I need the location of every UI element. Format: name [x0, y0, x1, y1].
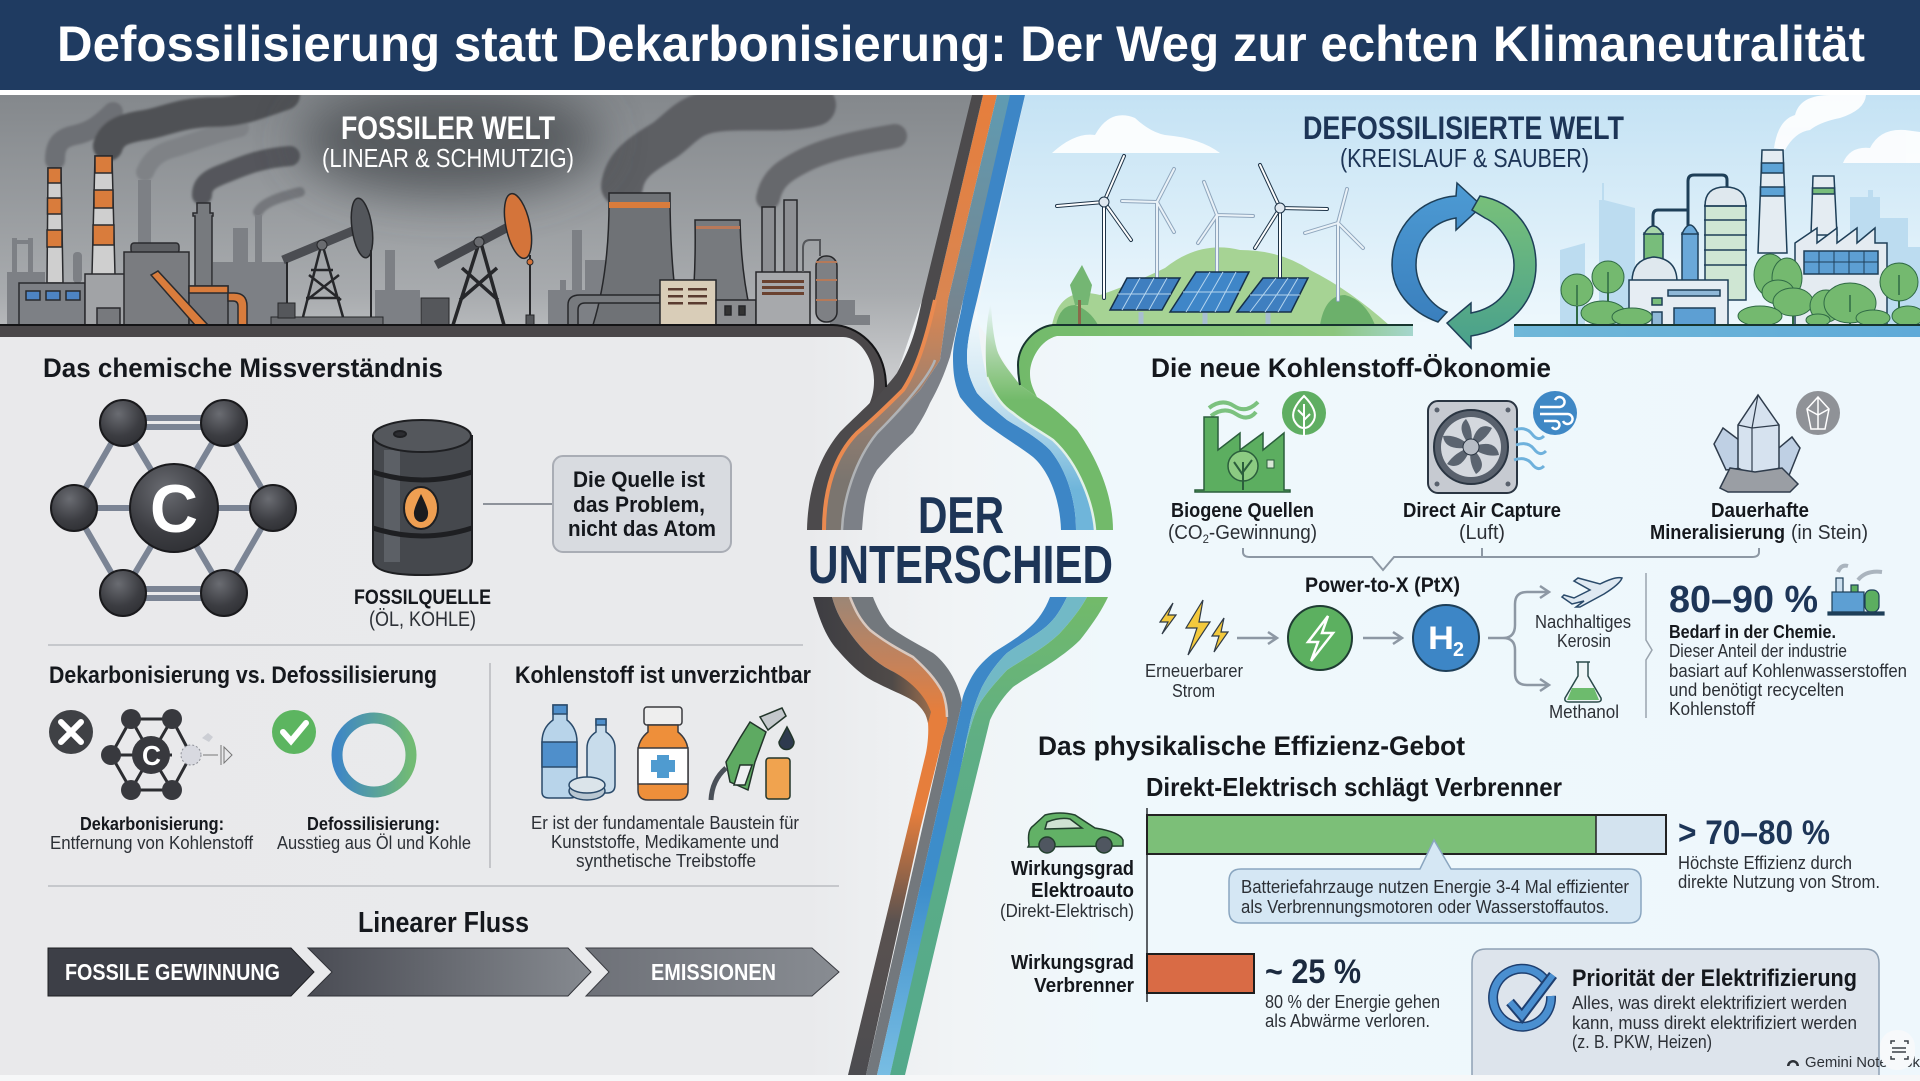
left skyline silhouettes [7, 180, 870, 325]
fossil heading: FOSSILER WELT [341, 110, 555, 146]
icon: small molecule with removed carbon [101, 709, 232, 800]
combustion label: Verbrenner [1034, 975, 1134, 997]
smoke clouds [55, 95, 895, 212]
arrow: to hydrogen [1363, 632, 1402, 644]
fossil ground line [0, 325, 886, 407]
stat: ev efficiency: > 70–80 % [1678, 814, 1830, 852]
callout: source is the problem: Die Quelle ist [573, 467, 706, 492]
icon: biogenic factory [1195, 402, 1290, 492]
callout: electrification priority: kann, muss direkt elektrifiziert werden [1572, 1013, 1857, 1033]
icon: crystals [1714, 395, 1800, 492]
heading: Linearer Fluss [358, 907, 529, 939]
solar panels [1110, 272, 1308, 325]
fossil heading [322, 110, 574, 173]
callout: battery vehicles: Batteriefahrzauge nutzen Energie 3-4 Mal effizienter [1241, 877, 1629, 897]
air capture label: Direct Air Capture [1403, 500, 1561, 522]
icon: check [272, 710, 316, 754]
stat: combustion efficiency: ~ 25 % [1265, 953, 1361, 991]
heading: Das chemische Missverständnis [43, 353, 443, 383]
callout: source is the problem: nicht das Atom [568, 516, 716, 541]
watermark: Gemini Notebook [1805, 1054, 1920, 1071]
clean industry [1629, 150, 1887, 325]
stat: combustion efficiency: 80 % der Energie gehen [1265, 992, 1440, 1012]
defossilization caption: Ausstieg aus Öl und Kohle [277, 833, 471, 853]
oil barrel [373, 420, 472, 575]
renewable label: Strom [1172, 681, 1215, 701]
icon: airplane [1562, 578, 1622, 607]
icon: leaf badge [1282, 391, 1326, 436]
arrow: middle step [308, 948, 591, 996]
center label: DER [918, 487, 1004, 545]
stat: chemistry demand: 80–90 % [1669, 579, 1818, 621]
defossilization caption: Defossilisierung: [307, 814, 440, 834]
panel: defossilized world scene [975, 95, 1920, 385]
icon: bottles [542, 705, 615, 800]
icon: electric car [1028, 813, 1123, 853]
barrel label: (ÖL, KOHLE) [369, 608, 476, 631]
chemistry text: Bedarf in der Chemie. [1669, 622, 1836, 642]
trees right [1561, 254, 1920, 326]
panel: carbon is indispensable [515, 662, 811, 871]
arrow: emissions [586, 948, 839, 996]
combustion label [1011, 952, 1134, 997]
icon: lightning [1160, 600, 1228, 655]
wind turbines [1057, 156, 1363, 300]
icon: small molecule with removed carbon: C [142, 740, 161, 771]
clean heading: (KREISLAUF & SAUBER) [1340, 143, 1589, 173]
icon: ring [337, 718, 411, 792]
biogenic label: (CO [1168, 522, 1205, 544]
callout: electrification priority [1472, 949, 1879, 1077]
chemistry text [1669, 622, 1907, 719]
clean ground line [1018, 325, 1920, 397]
lower right bands [877, 597, 1067, 1075]
cooling towers and plant [568, 193, 837, 325]
carbon description [531, 813, 799, 871]
chimneys and factory [19, 156, 247, 325]
arrow: to electrolysis [1237, 632, 1277, 644]
carbon description: Er ist der fundamentale Baustein für [531, 813, 799, 833]
kerosene label: Kerosin [1557, 631, 1611, 651]
icon: air capture fan [1428, 401, 1546, 493]
chemistry text: basiart auf Kohlenwasserstoffen [1669, 661, 1907, 681]
icon: fuel nozzle [711, 708, 794, 800]
subheading: Direkt-Elektrisch schlägt Verbrenner [1146, 772, 1562, 802]
combustion label: Wirkungsgrad [1011, 952, 1134, 974]
icon: small factory [1828, 566, 1884, 615]
background buildings [1560, 183, 1920, 325]
ev label: (Direkt-Elektrisch) [1000, 901, 1134, 921]
biogenic label: Biogene Quellen [1171, 500, 1314, 522]
fossil heading: (LINEAR & SCHMUTZIG) [322, 143, 574, 173]
mineralization label [1650, 500, 1868, 544]
arrow: fossil extraction [48, 948, 314, 996]
icon: flask [1565, 662, 1601, 702]
chemistry text: Kohlenstoff [1669, 699, 1756, 719]
ev label [1000, 858, 1134, 921]
carbon description: synthetische Treibstoffe [576, 851, 756, 871]
icon: cross [49, 710, 93, 754]
biogenic label: 2 [1203, 532, 1209, 546]
panel: chemical misunderstanding [43, 353, 731, 631]
stat: ev efficiency: Höchste Effizienz durch [1678, 853, 1852, 873]
arrow: branches [1488, 586, 1549, 691]
arrow: emissions: EMISSIONEN [651, 959, 776, 985]
bracket [1243, 548, 1759, 570]
clouds [1052, 95, 1920, 163]
callout: battery vehicles: als Verbrennungsmotoren oder Wasserstoffautos. [1241, 897, 1609, 917]
icon: green power circle [1288, 606, 1352, 670]
panel: decarbonization vs defossilization [49, 662, 471, 853]
panel: linear flow [48, 907, 839, 996]
lower left bands [832, 597, 947, 1075]
icon: hydrogen: 2 [1453, 639, 1464, 661]
decarbonization caption: Entfernung von Kohlenstoff [50, 833, 254, 853]
icon: hydrogen [1413, 605, 1479, 671]
callout: electrification priority: Alles, was direkt elektrifiziert werden [1572, 993, 1847, 1013]
icon: medicine bottle [638, 707, 688, 800]
barrel label [354, 586, 491, 631]
heading: Dekarbonisierung vs. Defossilisierung [49, 662, 437, 689]
barrel label: FOSSILQUELLE [354, 586, 491, 609]
chemistry text: Dieser Anteil der industrie [1669, 641, 1847, 661]
mineralization label: Dauerhafte [1711, 500, 1809, 522]
scan button [1880, 1030, 1915, 1070]
clean heading: DEFOSSILISIERTE WELT [1303, 110, 1624, 146]
green hill [1052, 247, 1389, 325]
air capture label: (Luft) [1459, 522, 1505, 544]
stat: ev efficiency: direkte Nutzung von Strom. [1678, 872, 1880, 892]
heading: Das physikalische Effizienz-Gebot [1038, 731, 1465, 761]
icon: hydrogen: H [1428, 620, 1454, 656]
heading glow [300, 85, 600, 195]
panel: new carbon economy [1145, 353, 1907, 722]
callout: source is the problem [553, 456, 731, 552]
stat: chemistry demand [1669, 566, 1884, 621]
arrow: fossil extraction: FOSSILE GEWINNUNG [65, 959, 280, 985]
panel: efficiency imperative [1000, 731, 1880, 1077]
decarbonization caption [50, 814, 254, 853]
air capture label [1403, 500, 1561, 544]
cycle arrows [1392, 183, 1536, 348]
heading: Kohlenstoff ist unverzichtbar [515, 662, 811, 689]
icon: checkmark badge [1493, 969, 1553, 1027]
biogenic label [1168, 500, 1317, 546]
ev label: Wirkungsgrad [1011, 858, 1134, 880]
central divider bands [807, 95, 1113, 1075]
methanol label: Methanol [1549, 702, 1619, 722]
center label: UNTERSCHIED [808, 535, 1113, 595]
trees left [1056, 265, 1375, 325]
stat: combustion efficiency: als Abwärme verloren. [1265, 1011, 1430, 1031]
carbon molecule: C [150, 471, 198, 547]
bar chart [1147, 808, 1666, 1002]
stat: ev efficiency [1678, 814, 1880, 892]
callout: battery vehicles [1229, 840, 1641, 923]
renewable label [1145, 661, 1243, 701]
callout: electrification priority: (z. B. PKW, Heizen) [1572, 1032, 1712, 1052]
carbon description: Kunststoffe, Medikamente und [551, 832, 779, 852]
title: Defossilisierung statt Dekarbonisierung: Der Weg zur echten Klimaneutralität [57, 16, 1865, 72]
stat: combustion efficiency [1265, 953, 1440, 1031]
panel: fossil world scene [0, 85, 975, 395]
renewable label: Erneuerbarer [1145, 661, 1243, 681]
kerosene label: Nachhaltiges [1535, 612, 1631, 632]
icon: mineral badge [1796, 391, 1840, 435]
callout: source is the problem: das Problem, [573, 492, 705, 517]
callout: electrification priority: Priorität der Elektrifizierung [1572, 965, 1857, 992]
clean heading [1303, 110, 1624, 173]
mineralization label: (in Stein) [1791, 522, 1868, 544]
heading: Die neue Kohlenstoff-Ökonomie [1151, 353, 1551, 383]
mineralization label: Mineralisierung [1650, 522, 1785, 544]
ev label: Elektroauto [1031, 880, 1134, 902]
carbon molecule [51, 400, 296, 616]
header banner [0, 0, 1920, 95]
biogenic label: -Gewinnung) [1209, 522, 1317, 544]
chemistry text: und benötigt recycelten [1669, 680, 1844, 700]
ptx heading: Power-to-X (PtX) [1305, 574, 1460, 597]
kerosene label [1535, 612, 1631, 651]
defossilization caption [277, 814, 471, 853]
center label [808, 487, 1113, 595]
oil pump 2 [421, 191, 537, 325]
bar: combustion [1147, 954, 1254, 993]
bar: electric [1147, 815, 1666, 854]
icon: wind badge [1533, 391, 1577, 435]
decarbonization caption: Dekarbonisierung: [80, 814, 224, 834]
oil pump 1 [271, 197, 383, 325]
